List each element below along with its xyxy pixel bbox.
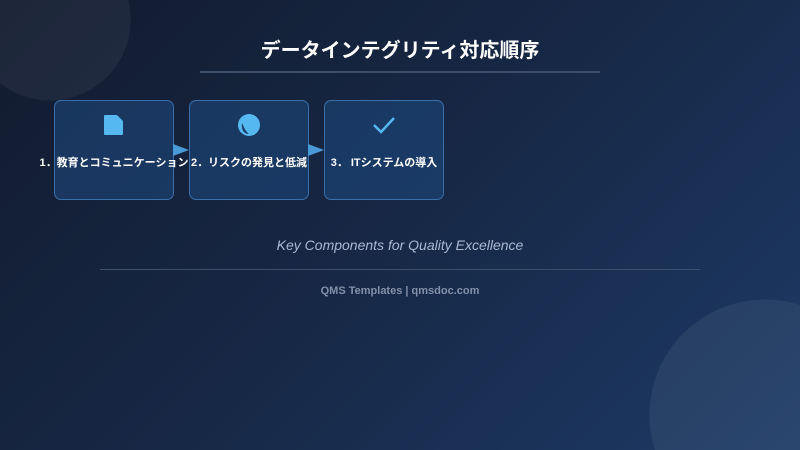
label 3: 3． ITシステムの導入: [331, 157, 437, 169]
step 1 box: [54, 100, 174, 200]
label 2: 2．リスクの発見と低減: [191, 157, 307, 169]
step 2 box: [189, 100, 309, 200]
arrow 2: [308, 144, 324, 156]
step 3 box: [324, 100, 444, 200]
icon: globe: [238, 114, 260, 136]
subtitle: Key Components for Quality Excellence: [277, 237, 523, 253]
label 1: 1．教育とコミュニケーション: [40, 157, 188, 169]
arrow 1: [173, 144, 189, 156]
title: データインテグリティ対応順序: [261, 40, 539, 62]
icon: check: [373, 117, 395, 134]
icon: document: [104, 115, 123, 135]
footer: QMS Templates | qmsdoc.com: [321, 285, 479, 297]
